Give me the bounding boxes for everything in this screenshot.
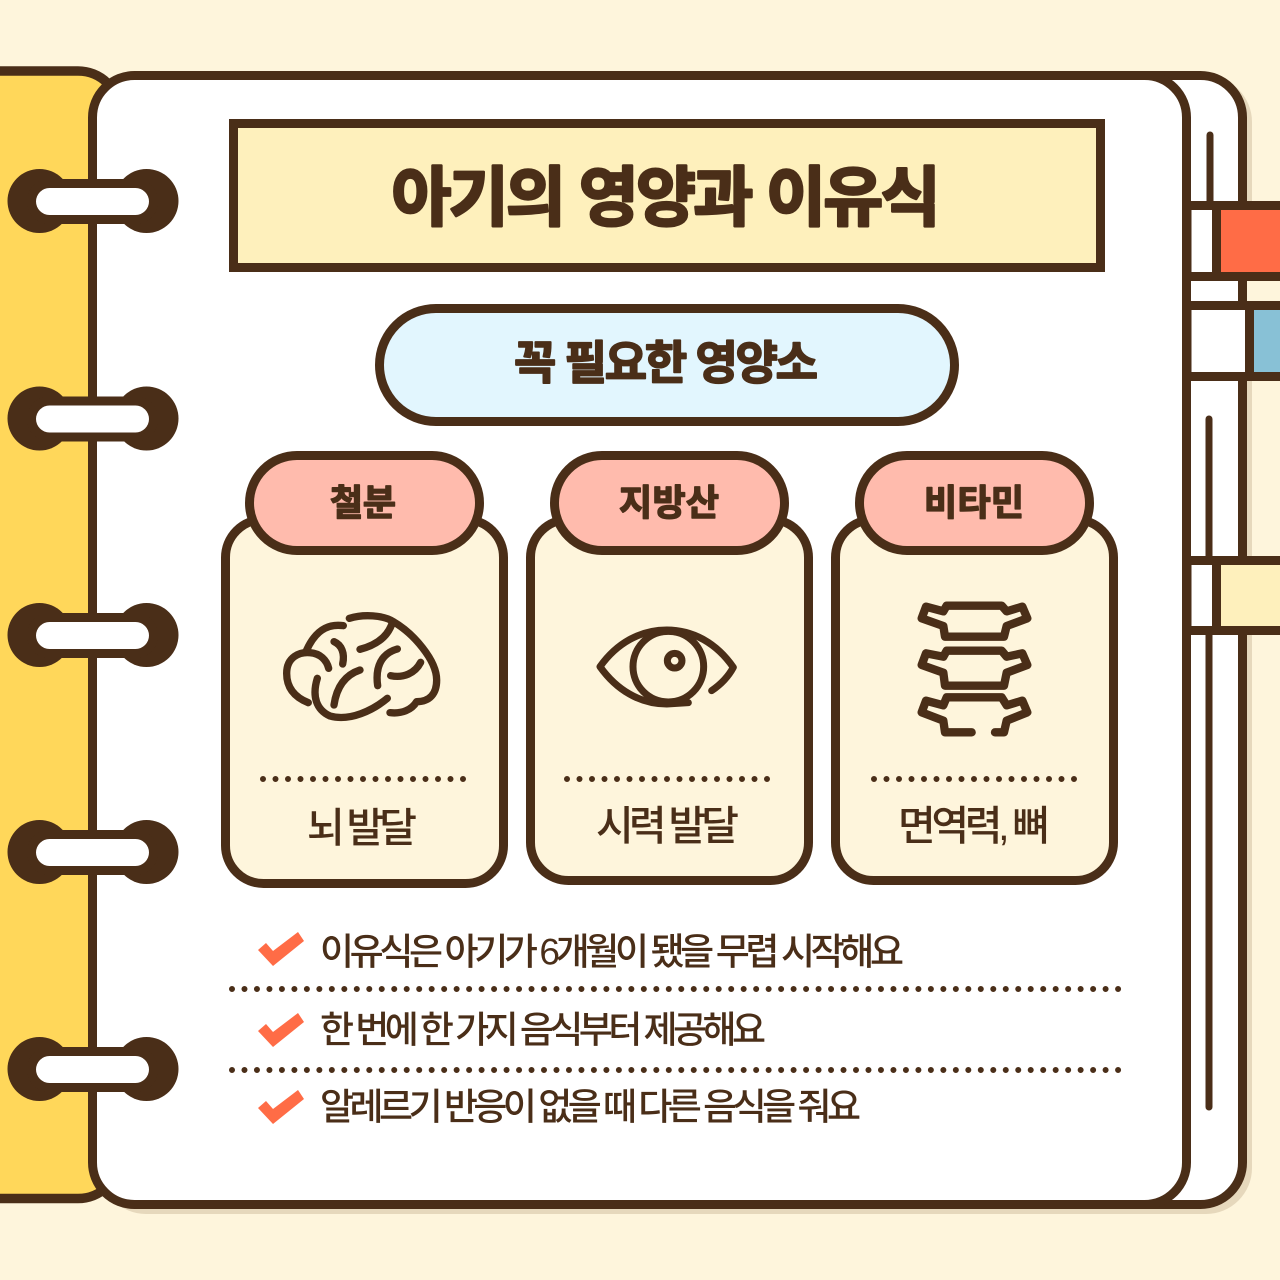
- subheading: 꼭 필요한 영양소: [514, 337, 818, 389]
- spiral rings: [8, 169, 178, 1101]
- tag: iron: 철분: [330, 482, 396, 523]
- tag: vitamin: 비타민: [924, 482, 1024, 523]
- dotted divider: [874, 776, 1076, 782]
- back page: [1040, 76, 1242, 1204]
- title: 아기의 영양과 이유식: [392, 161, 940, 234]
- tag: vitamin: [860, 456, 1090, 550]
- gap background between tabs: [1247, 281, 1280, 301]
- dotted divider: [232, 986, 1120, 992]
- label: immunity, bones: 면역력, 뼈: [898, 803, 1050, 849]
- item 1: 이유식은 아기가 6개월이 됐을 무렵 시작해요: [320, 932, 904, 972]
- yellow notebook cover: [0, 71, 120, 1198]
- checklist: [232, 932, 1120, 1128]
- panel: vitamin: [836, 456, 1114, 880]
- subheading pill: [380, 308, 954, 422]
- icon: brain: [287, 616, 437, 717]
- ring 1: [8, 169, 178, 233]
- icon: eye: [600, 630, 733, 704]
- tab: red: [1187, 206, 1280, 276]
- ring 4: [8, 820, 178, 884]
- tag: iron: [250, 456, 480, 550]
- dotted divider: [567, 776, 769, 782]
- icon: spine: [922, 606, 1027, 732]
- label: brain development: 뇌 발달: [307, 805, 417, 851]
- back page lower line: [1206, 419, 1212, 1107]
- label: vision development: 시력 발달: [596, 803, 739, 849]
- ring 2: [8, 386, 178, 450]
- title banner: [234, 124, 1100, 268]
- tab: blue: [1187, 306, 1280, 376]
- panel: iron: [226, 456, 504, 884]
- item 3: 알레르기 반응이 없을 때 다른 음식을 줘요: [320, 1086, 861, 1128]
- item 2: 한 번에 한 가지 음식부터 제공해요: [320, 1010, 766, 1050]
- ring 3: [8, 603, 178, 667]
- tag: fat: 지방산: [619, 482, 719, 523]
- ring 5: [8, 1037, 178, 1101]
- panel: fat: [530, 456, 808, 880]
- main white page: [92, 76, 1186, 1204]
- dotted divider: [232, 1067, 1120, 1073]
- tag: fat: [554, 456, 784, 550]
- tab: yellow: [1187, 560, 1280, 630]
- back page upper line: [1206, 135, 1214, 205]
- dotted divider: [263, 776, 465, 782]
